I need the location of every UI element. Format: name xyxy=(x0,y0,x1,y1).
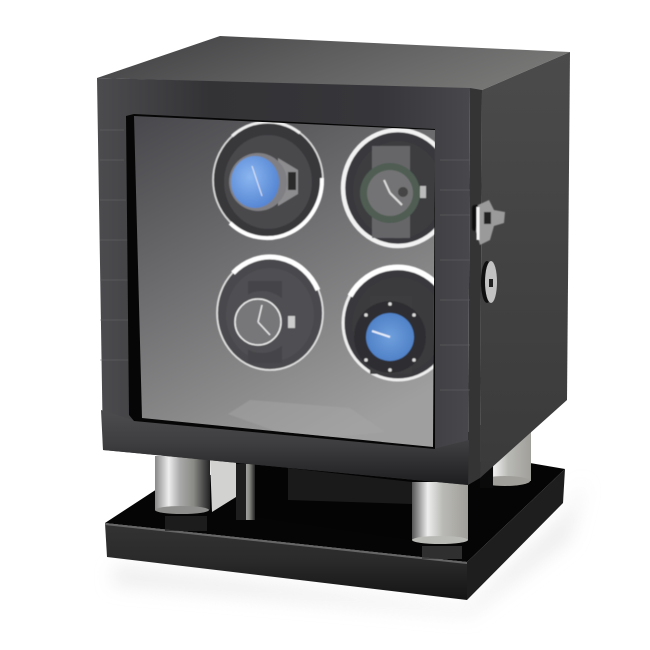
cabinet top face xyxy=(97,36,570,90)
cabinet front frame xyxy=(97,78,470,485)
window black lip xyxy=(126,114,435,449)
background gap under cabinet xyxy=(210,458,236,512)
latch clasp xyxy=(472,200,505,245)
pillar: front left xyxy=(155,456,210,531)
base plinth xyxy=(105,430,565,600)
control panel reflection xyxy=(230,400,332,437)
cabinet right side xyxy=(480,52,570,478)
winder module: top right xyxy=(343,130,453,246)
rear void under cabinet xyxy=(236,460,412,540)
watch: blue dial chronograph xyxy=(354,296,426,374)
product illustration: watch winder cabinet xyxy=(97,36,574,601)
frame lower rail xyxy=(101,410,469,485)
pillar: front right xyxy=(412,482,468,559)
base front edge xyxy=(105,523,467,600)
glass window xyxy=(134,116,435,447)
winder module: bottom left xyxy=(217,256,323,370)
cabinet xyxy=(97,36,570,485)
base right edge xyxy=(467,469,565,600)
winder module: bottom right xyxy=(341,264,434,382)
pillar: back right xyxy=(480,425,531,488)
watch: chronograph xyxy=(231,281,295,363)
base top surface xyxy=(105,430,565,562)
door edge xyxy=(468,88,482,485)
winder module: top left xyxy=(213,122,323,238)
floor shadow xyxy=(112,480,585,615)
watch: steel diver xyxy=(360,146,426,238)
pillar: back left xyxy=(236,464,255,520)
watch: blue dial xyxy=(229,153,298,211)
keyhole lock xyxy=(481,261,497,303)
